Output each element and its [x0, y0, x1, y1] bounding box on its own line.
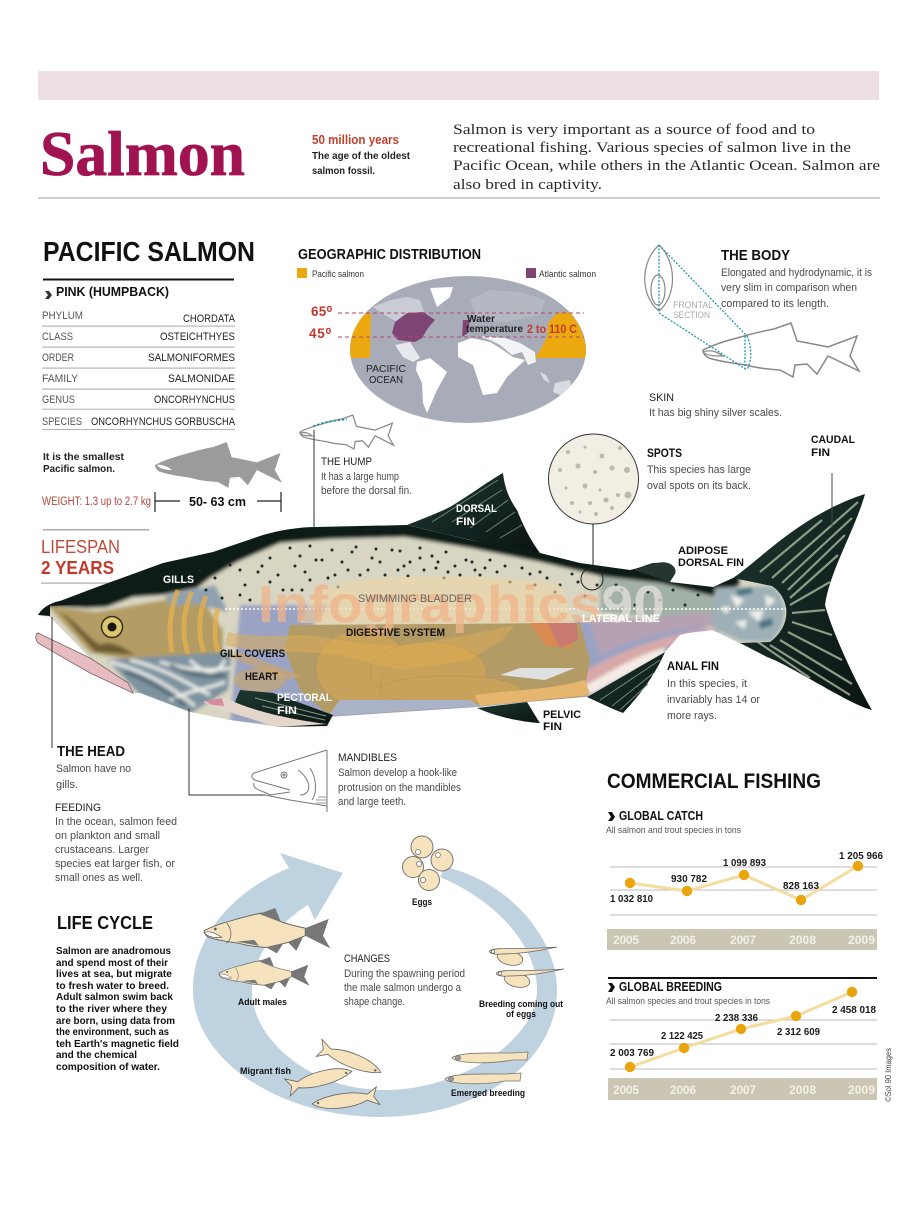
taxonomy table — [42, 310, 236, 430]
anatomical labels: GILLS — [163, 574, 194, 586]
chart: global catch: 1 205 966 — [839, 851, 883, 862]
migrant fish — [240, 1039, 384, 1114]
callout: anal fin — [667, 659, 760, 722]
fossil age callout — [312, 133, 411, 177]
description: composition of water. — [56, 1062, 160, 1073]
taxonomy table: GENUS — [42, 394, 75, 406]
swimming bladder overlay — [300, 576, 575, 623]
adipose fin — [634, 562, 676, 582]
fossil age callout: 50 million years — [312, 133, 399, 147]
chart: global catch: All salmon and trout species in tons — [606, 825, 741, 836]
anatomical labels: LATERAL LINE — [582, 613, 660, 625]
chart: global breeding: 2 003 769 — [610, 1048, 654, 1059]
taxonomy table: SALMONIFORMES — [148, 352, 235, 364]
taxonomy table: PHYLUM — [42, 310, 83, 322]
callout: the head: THE HEAD — [57, 744, 125, 760]
adult males — [204, 908, 330, 1008]
water temperature: 2 to 110 C — [527, 322, 577, 336]
callout: the head: Salmon have no — [56, 763, 131, 775]
taxonomy table: ONCORHYNCHUS GORBUSCHA — [91, 416, 236, 428]
description: to the river where they — [56, 1004, 167, 1015]
latitude lines — [338, 313, 584, 337]
size note — [43, 452, 125, 475]
description: are born, using data from — [56, 1016, 175, 1027]
frontal section label — [673, 300, 713, 321]
digestive overlay — [225, 623, 590, 716]
chart: global catch: 930 782 — [671, 874, 707, 885]
breeding coming out of eggs — [479, 947, 564, 1020]
chart: global catch: 2007 — [730, 933, 756, 947]
body — [38, 525, 786, 726]
intro paragraph: also bred in captivity. — [453, 176, 602, 193]
weight label: WEIGHT: 1.3 up to 2.7 kg — [42, 496, 151, 508]
lifespan: LIFESPAN — [41, 537, 120, 557]
chart: global catch — [606, 808, 883, 950]
callout: spots — [548, 434, 751, 590]
chart: global catch: 2005 — [613, 933, 639, 947]
anatomical labels: PELVIC — [543, 709, 581, 721]
frontal section diagram — [645, 245, 751, 370]
panel: life cycle — [56, 836, 564, 1117]
pacific ocean label: OCEAN — [369, 374, 403, 386]
intro paragraph: recreational fishing. Various species of salmon live in the — [453, 139, 851, 156]
callout: mandibles: Salmon develop a hook-like — [338, 767, 457, 779]
callout: spots: SPOTS — [647, 446, 682, 460]
anatomical labels: HEART — [245, 671, 278, 683]
changes text: shape change. — [344, 996, 405, 1008]
breeding coming out of eggs: Breeding coming out — [479, 999, 564, 1010]
callout: the hump: before the dorsal fin. — [321, 485, 412, 497]
callout: mandibles — [189, 708, 461, 812]
description: Salmon are anadromous — [56, 946, 171, 957]
lifespan — [41, 537, 120, 578]
anatomical labels: SWIMMING BLADDER — [358, 593, 472, 605]
intro paragraph: Salmon is very important as a source of food and to — [453, 121, 815, 138]
callout: the head: In the ocean, salmon feed — [55, 816, 177, 828]
chart: global breeding: 2006 — [670, 1083, 696, 1097]
header band — [38, 71, 879, 100]
caudal fin — [713, 494, 872, 710]
water temperature: temperature — [466, 324, 523, 335]
description: Adult salmon swim back — [56, 992, 173, 1003]
fossil age callout: The age of the oldest — [312, 151, 411, 162]
latitude 45: 45⁰ — [309, 326, 332, 341]
heading: COMMERCIAL FISHING — [607, 770, 821, 793]
taxonomy table: SPECIES — [42, 416, 82, 428]
callout: spots: This species has large — [647, 464, 751, 476]
heading and text: very slim in comparison when — [721, 282, 857, 294]
callout: anal fin: ANAL FIN — [667, 659, 719, 673]
anatomical labels: DIGESTIVE SYSTEM — [346, 627, 445, 639]
lifespan: 2 YEARS — [41, 558, 114, 578]
subheading: pink humpback: PINK (HUMPBACK) — [56, 284, 169, 299]
description: and spend most of their — [56, 958, 168, 969]
callout: anal fin: In this species, it — [667, 678, 747, 690]
callout: mandibles: and large teeth. — [338, 796, 406, 808]
water temperature: Water — [467, 314, 495, 325]
callout: spots: oval spots on its back. — [647, 480, 751, 492]
frontal section label: SECTION — [673, 310, 710, 321]
description: to fresh water to breed. — [56, 981, 169, 992]
anal fin — [580, 652, 665, 713]
size note: It is the smallest — [43, 452, 125, 463]
dense back spots — [200, 546, 698, 605]
body outline fish — [703, 323, 859, 377]
chart: global breeding: 2 122 425 — [661, 1031, 703, 1042]
callout: the hump — [300, 415, 412, 528]
world map — [350, 276, 590, 423]
heading and text: compared to its length. — [721, 298, 829, 310]
skin note — [649, 392, 782, 419]
heading: LIFE CYCLE — [57, 913, 153, 933]
frontal section label: FRONTAL — [673, 300, 713, 311]
heading and text: Elongated and hydrodynamic, it is — [721, 267, 872, 279]
chart: global catch: 2006 — [670, 933, 696, 947]
mandible head drawing — [252, 750, 327, 812]
chart: global breeding: 2 238 336 — [715, 1013, 758, 1024]
panel: the body — [645, 245, 872, 419]
chart: global catch: 828 163 — [783, 881, 819, 892]
snout — [38, 598, 84, 616]
dorsal fin — [407, 473, 540, 553]
anatomical labels: ADIPOSE — [678, 545, 728, 557]
eggs: Eggs — [412, 897, 432, 908]
adult males: Adult males — [238, 997, 287, 1008]
callout: the head: FEEDING — [55, 802, 101, 814]
callout: the head: species eat larger fish, or — [55, 858, 175, 870]
breeding coming out of eggs: of eggs — [506, 1009, 536, 1020]
chart: global breeding: 2007 — [730, 1083, 756, 1097]
description — [56, 946, 179, 1073]
callout: the head — [52, 617, 177, 884]
callout: the head: small ones as well. — [55, 872, 143, 884]
heading: GEOGRAPHIC DISTRIBUTION — [298, 247, 481, 263]
taxonomy table: CHORDATA — [183, 313, 236, 325]
fossil age callout: salmon fossil. — [312, 166, 375, 177]
taxonomy table: FAMILY — [42, 373, 79, 385]
panel: geographic distribution — [297, 247, 596, 423]
callout: mandibles: protrusion on the mandibles — [338, 782, 461, 794]
emerged breeding — [445, 1052, 528, 1099]
callout: the head: gills. — [56, 779, 78, 791]
chart: global catch: 1 099 893 — [723, 858, 766, 869]
pelvic fin — [477, 702, 540, 723]
legend: Atlantic salmon — [539, 269, 596, 279]
changes text: the male salmon undergo a — [344, 982, 462, 994]
magnified skin circle — [548, 434, 638, 524]
description: and the chemical — [56, 1050, 137, 1061]
description: teh Earth's magnetic field — [56, 1039, 179, 1050]
pacific ocean label — [366, 363, 406, 386]
icon: grey salmon silhouette — [155, 442, 282, 488]
chart: global catch: 1 032 810 — [610, 894, 653, 905]
size ruler — [155, 492, 281, 512]
anatomical labels: FIN — [543, 721, 562, 733]
chart: global catch: GLOBAL CATCH — [619, 808, 703, 823]
anatomical labels: FIN — [277, 705, 297, 717]
size ruler: 50- 63 cm — [189, 495, 246, 509]
chart: global breeding: 2 312 609 — [777, 1027, 820, 1038]
chart: global breeding: 2 458 018 — [832, 1005, 876, 1016]
anatomical labels: FIN — [456, 516, 475, 528]
callout: anal fin: invariably has 14 or — [667, 694, 760, 706]
eye — [102, 616, 122, 638]
callout: the head: on plankton and small — [55, 830, 160, 842]
panel: commercial fishing — [606, 770, 883, 1100]
anatomical labels: PECTORAL — [277, 692, 332, 704]
size note: Pacific salmon. — [43, 464, 115, 475]
anatomical labels: DORSAL FIN — [678, 557, 744, 569]
eggs — [402, 836, 453, 908]
title: Salmon — [40, 118, 245, 189]
taxonomy table: CLASS — [42, 331, 73, 343]
migrant fish: Migrant fish — [240, 1066, 291, 1077]
heading: pacific salmon: PACIFIC SALMON — [43, 236, 255, 267]
callout: anal fin: more rays. — [667, 710, 717, 722]
chart: global breeding: All salmon species and trout species in tons — [606, 996, 770, 1007]
description: the environment, such as — [56, 1027, 169, 1038]
water temperature — [466, 314, 577, 336]
emerged breeding: Emerged breeding — [451, 1088, 525, 1099]
chart: global breeding: 2008 — [789, 1083, 816, 1097]
anatomical labels: CAUDAL — [811, 434, 855, 446]
head overlay gill stripes — [170, 590, 218, 654]
intro paragraph — [453, 121, 880, 193]
changes text — [344, 953, 465, 1008]
chart: global catch: 2008 — [789, 933, 816, 947]
chart: global breeding — [606, 979, 877, 1100]
anatomical labels: GILL COVERS — [220, 648, 285, 660]
heading and text — [721, 247, 872, 310]
cycle arrow — [193, 853, 557, 1117]
credit: ©Sol 90 Images — [884, 1048, 893, 1102]
heading and text: THE BODY — [721, 247, 790, 264]
panel: main salmon illustration — [30, 434, 872, 735]
latitude 65: 65⁰ — [311, 304, 333, 319]
changes text: CHANGES — [344, 953, 390, 965]
anatomical labels: DORSAL — [456, 503, 497, 515]
caudal pointer — [831, 473, 833, 528]
intro paragraph: Pacific Ocean, while others in the Atlantic Ocean. Salmon are — [453, 157, 880, 174]
description: lives at sea, but migrate — [56, 969, 172, 980]
chart: global catch: 2009 — [848, 933, 875, 947]
chart: global breeding: 2009 — [848, 1083, 875, 1097]
watermark: Infographics 90 — [258, 576, 665, 634]
callout: the hump: It has a large hump — [321, 471, 399, 483]
pectoral fin — [203, 690, 333, 727]
taxonomy table: OSTEICHTHYES — [160, 331, 235, 343]
taxonomy table: ORDER — [42, 352, 74, 364]
legend: Pacific salmon — [312, 269, 364, 279]
callout: the hump: THE HUMP — [321, 456, 372, 468]
chart: global breeding: GLOBAL BREEDING — [619, 979, 722, 994]
skin note: It has big shiny silver scales. — [649, 407, 782, 419]
taxonomy table: SALMONIDAE — [168, 373, 235, 385]
anatomical labels: FIN — [811, 447, 830, 459]
pacific ocean label: PACIFIC — [366, 363, 406, 375]
lateral line — [225, 608, 822, 610]
chart: global breeding: 2005 — [613, 1083, 639, 1097]
callout: the head: crustaceans. Larger — [55, 844, 149, 856]
taxonomy table: ONCORHYNCHUS — [154, 394, 235, 406]
changes text: During the spawning period — [344, 968, 465, 980]
hump fish outline — [300, 415, 394, 449]
lower jaw — [36, 633, 133, 693]
anatomical labels — [163, 434, 855, 733]
callout: mandibles: MANDIBLES — [338, 752, 397, 764]
legend — [297, 268, 596, 279]
skin note: SKIN — [649, 392, 674, 404]
